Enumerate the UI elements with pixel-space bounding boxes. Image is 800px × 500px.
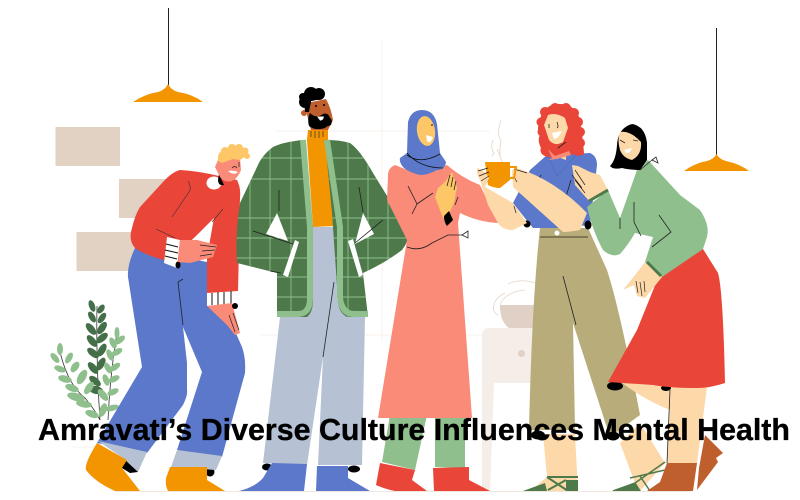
side table with bowl	[482, 281, 535, 491]
arms	[480, 180, 527, 230]
orange shoes	[86, 443, 225, 491]
brown boots	[647, 435, 723, 491]
legs	[622, 383, 707, 463]
trouser cuffs	[98, 441, 222, 472]
lapels	[277, 140, 368, 314]
green sweater	[587, 160, 708, 277]
person: red-haired woman with cup	[477, 103, 665, 491]
person: bearded man in green jacket	[230, 87, 410, 491]
green trousers	[382, 415, 465, 470]
arm gaps	[266, 213, 374, 244]
right hanging lamp	[684, 28, 749, 171]
left hanging lamp	[133, 8, 203, 102]
salmon dress	[378, 165, 498, 418]
jacket fold lines	[253, 187, 383, 273]
jacket check pattern	[230, 140, 410, 320]
blue shoes	[239, 463, 370, 491]
orange top	[307, 130, 336, 227]
red skirt	[608, 249, 725, 388]
person: laughing man in red sweater	[86, 144, 250, 491]
coffee cup and steam	[477, 120, 516, 188]
head	[307, 99, 333, 130]
black cuffs	[524, 220, 592, 230]
black hair	[610, 124, 647, 170]
khaki trousers	[529, 228, 640, 437]
scarf	[548, 149, 571, 160]
afro hair	[299, 87, 325, 112]
red curly hair	[536, 103, 585, 158]
sleeve bands	[589, 190, 661, 276]
person: woman in blue hijab	[376, 110, 498, 491]
background wall lines	[72, 40, 490, 447]
black underside of trouser hems	[531, 430, 620, 440]
potted plant	[49, 299, 127, 420]
person: woman in green sweater and red skirt	[572, 124, 725, 491]
floor line	[115, 490, 690, 492]
hijab	[400, 110, 446, 175]
hands	[572, 165, 608, 202]
bare legs and feet	[530, 423, 665, 491]
red boots	[376, 463, 490, 491]
face	[415, 115, 437, 147]
face	[544, 114, 568, 144]
head	[215, 158, 241, 182]
green sandals	[523, 462, 665, 491]
face	[618, 132, 641, 160]
socks	[262, 464, 360, 472]
wall bricks	[56, 127, 169, 271]
dress fold lines and belt	[407, 186, 462, 249]
blue blouse	[513, 153, 597, 228]
sleeve cuff	[207, 291, 238, 306]
sweater fold lines	[620, 160, 671, 247]
title: Amravati’s Diverse Culture Influences Mental Health	[38, 412, 790, 447]
wrist cuff	[164, 237, 180, 268]
neck	[550, 145, 566, 160]
hands	[178, 240, 217, 263]
socks	[122, 459, 214, 476]
red sweater	[131, 170, 240, 297]
blond hair	[218, 144, 250, 163]
raised hand	[435, 172, 457, 218]
green jacket	[236, 140, 408, 317]
grey trousers	[263, 227, 365, 465]
blue trousers	[97, 248, 245, 457]
beard	[308, 113, 332, 129]
collar	[206, 176, 222, 190]
pocket slits	[283, 239, 363, 277]
